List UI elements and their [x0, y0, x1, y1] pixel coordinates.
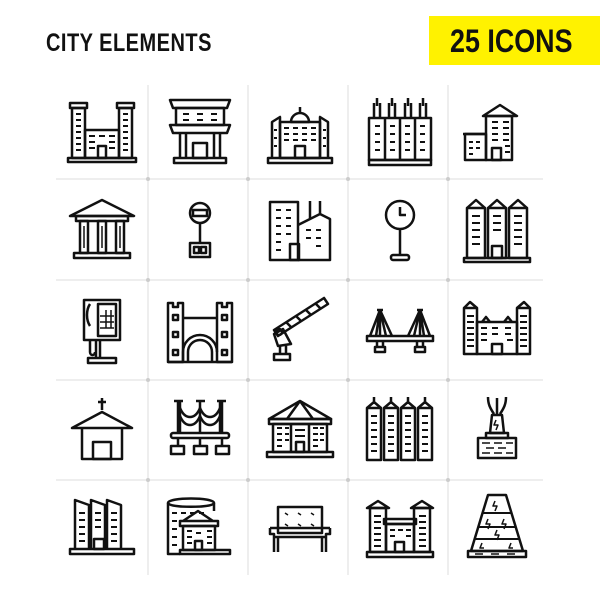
- icon: domed building: [268, 107, 332, 163]
- icon: palace building: [464, 302, 530, 354]
- icon: round tower with pavilion: [168, 498, 230, 554]
- icon: palace with side towers: [367, 501, 433, 557]
- icon: office towers: [270, 201, 330, 260]
- icon: bus stop sign: [190, 203, 210, 257]
- icon: phone booth: [84, 300, 120, 363]
- badge: 25 icons: [429, 16, 600, 65]
- icon: four towers with antennas: [369, 98, 431, 165]
- icon: castle gate: [168, 303, 232, 362]
- icon: tower with low block: [463, 105, 517, 160]
- icon: pagoda house: [170, 100, 230, 163]
- badge: 25 icons: 25 ICONS: [450, 23, 572, 59]
- icon: suspension bridge: [367, 310, 433, 352]
- icon: four skyscrapers: [367, 397, 432, 460]
- icon: billboard bench: [270, 507, 330, 552]
- icon: traffic cone: [468, 495, 526, 557]
- icon: road barrier: [274, 298, 328, 360]
- icon: classical bank: [70, 200, 134, 258]
- icon: monument fountain: [478, 397, 516, 458]
- icon: three towers: [464, 200, 530, 262]
- icon: street clock: [386, 201, 414, 260]
- icon: church house: [72, 398, 132, 459]
- title: CITY ELEMENTS: [46, 29, 212, 57]
- icon: pavilion building: [267, 401, 333, 457]
- icon: bridge with pillars: [171, 401, 229, 454]
- icon: slanted office towers: [70, 500, 134, 554]
- icon: twin tower building: [68, 103, 136, 162]
